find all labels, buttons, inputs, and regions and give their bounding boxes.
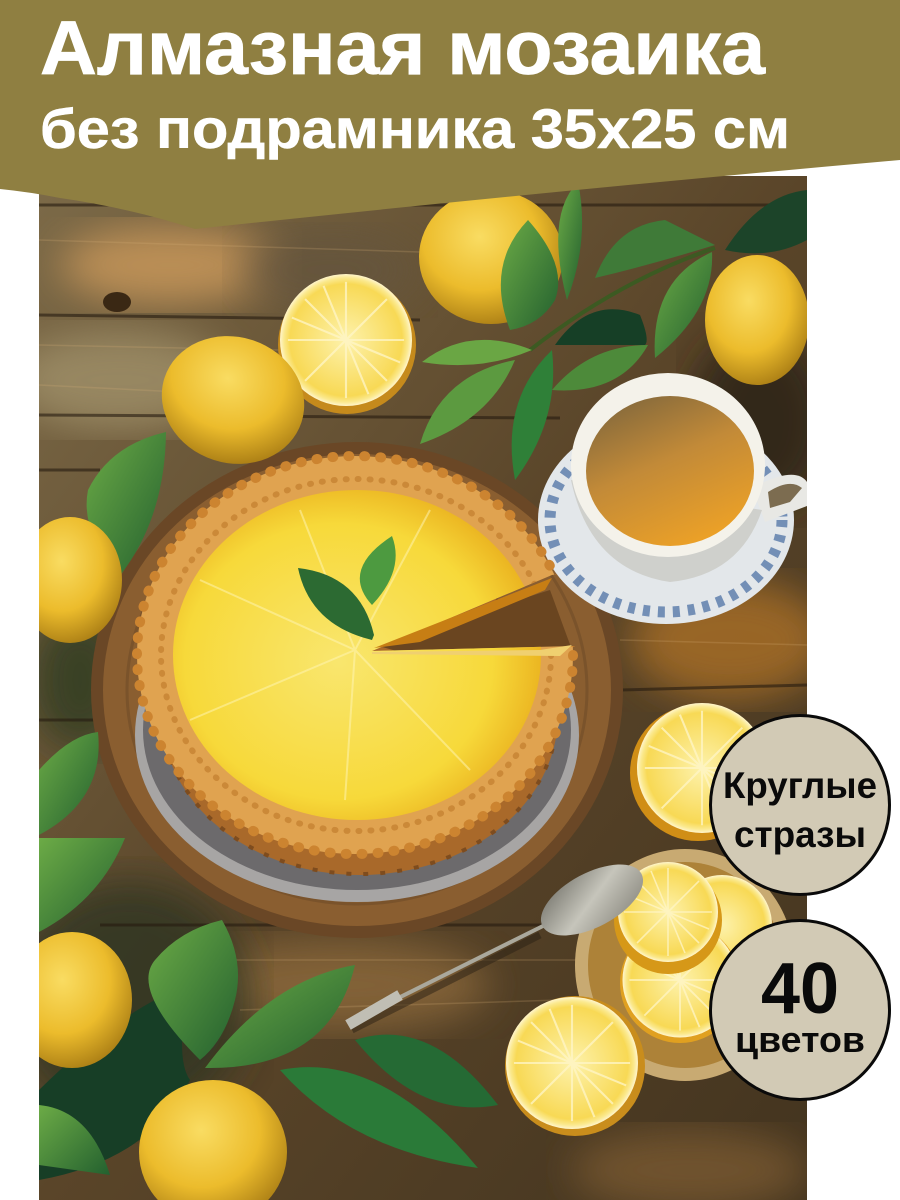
title: Алмазная мозаика	[40, 6, 766, 91]
filling	[173, 490, 541, 820]
badge: 40 colours	[710, 920, 890, 1100]
badge: 40 colours: цветов	[735, 1019, 865, 1060]
bottom left lemon	[39, 932, 132, 1068]
tart	[137, 456, 573, 875]
branch with leaves	[420, 182, 807, 480]
badge: round rhinestones: Круглые	[723, 765, 877, 806]
cut lemon upper right	[630, 703, 753, 841]
subtitle: без подрамника 35х25 см	[40, 97, 790, 160]
whole lemon	[162, 336, 304, 464]
tart leaves	[298, 536, 396, 640]
badge: round rhinestones	[710, 716, 890, 894]
bottom lemon	[139, 1080, 287, 1200]
painting: lemon tart on wooden table	[10, 176, 830, 1200]
teacup	[571, 373, 807, 582]
badge: 40 colours: 40	[761, 949, 839, 1029]
crust	[137, 456, 573, 854]
cut lemon top	[278, 274, 416, 414]
saucer	[538, 449, 794, 624]
wooden board	[91, 442, 623, 938]
bottom left leaf	[39, 1105, 110, 1175]
bottom left leaves	[39, 920, 498, 1180]
plate	[135, 692, 579, 902]
banner	[0, 0, 900, 229]
cut lemon bottom	[505, 996, 645, 1136]
lemons top	[419, 190, 809, 385]
spoon	[348, 850, 654, 1030]
badge: round rhinestones: стразы	[734, 814, 866, 855]
wooden table	[10, 176, 830, 1200]
left lemon and leaf	[39, 432, 166, 643]
left leaves	[39, 732, 125, 932]
bottom right cut lemons on plate	[575, 849, 795, 1081]
